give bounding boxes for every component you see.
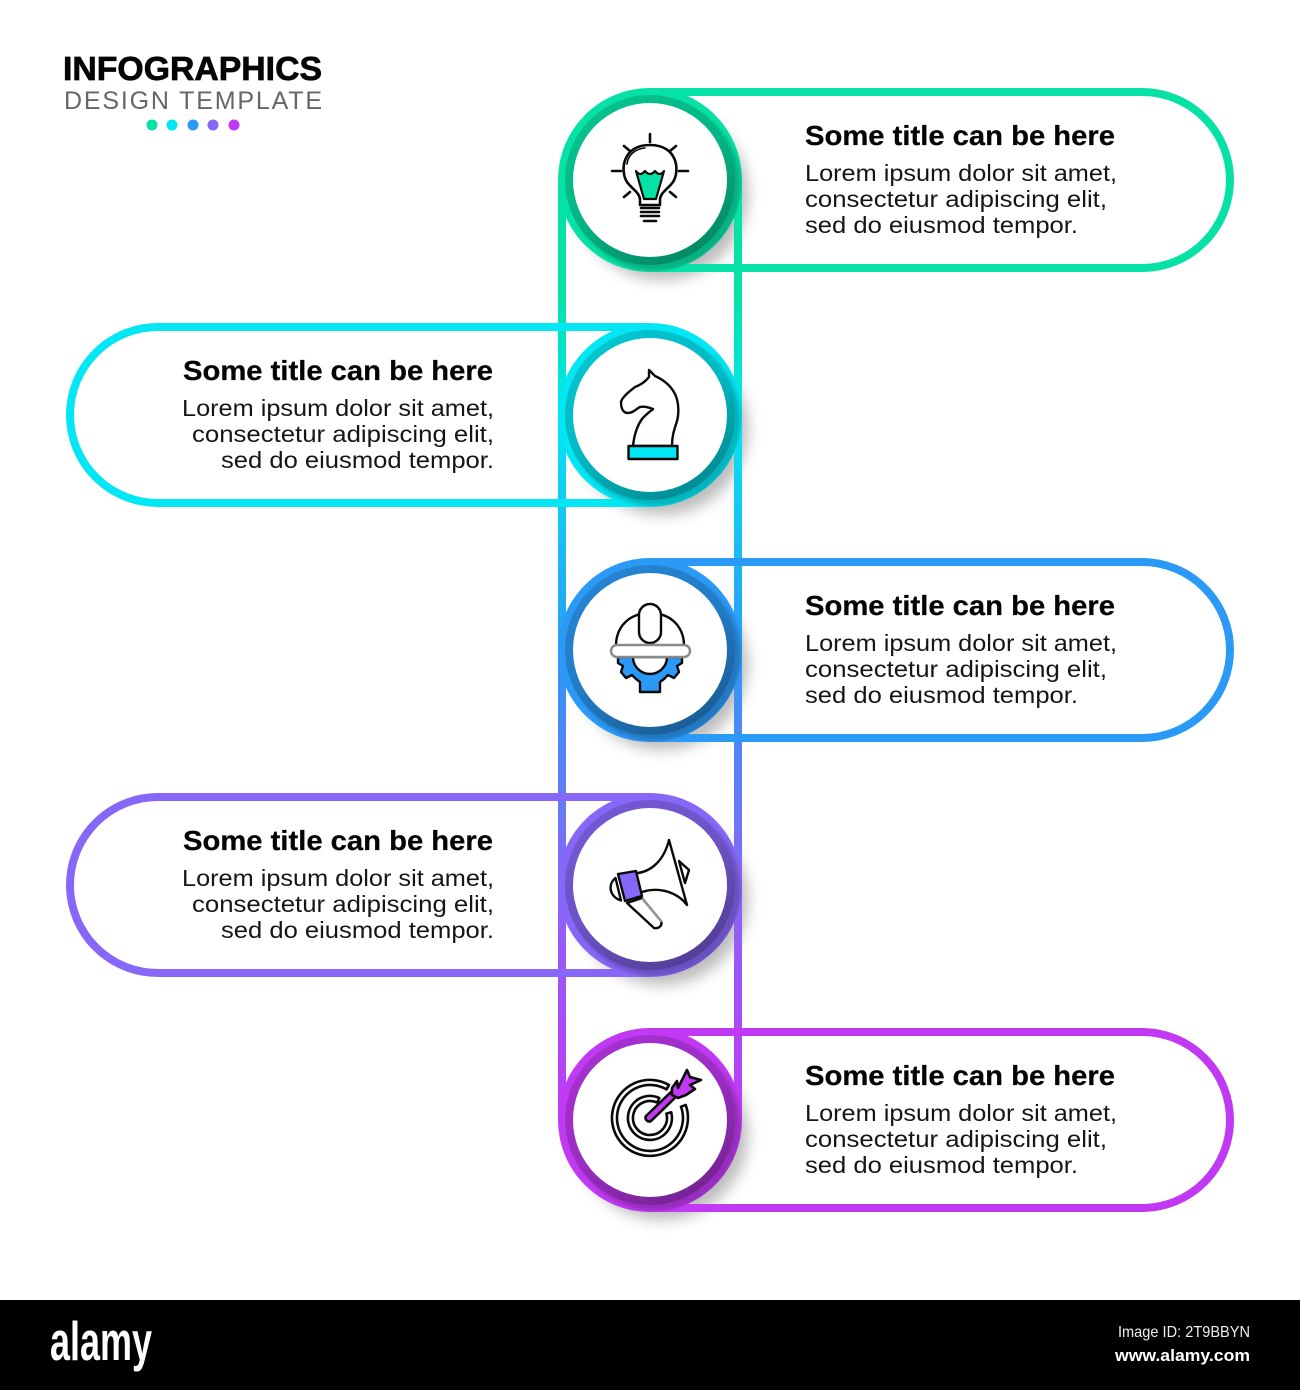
step 3 text: Some title can be here bbox=[805, 590, 1115, 621]
pill outline bbox=[650, 92, 1230, 268]
panel: step 3 bbox=[558, 558, 1230, 742]
step 5 text: consectetur adipiscing elit, bbox=[805, 1126, 1107, 1152]
step 1 text: sed do eiusmod tempor. bbox=[805, 212, 1078, 238]
step 4 text: sed do eiusmod tempor. bbox=[221, 917, 494, 943]
step 5 text: sed do eiusmod tempor. bbox=[805, 1152, 1078, 1178]
icon: chess knight bbox=[621, 370, 678, 459]
pill outline bbox=[650, 1032, 1230, 1208]
step 2 text bbox=[182, 355, 494, 473]
panel: step 4 bbox=[70, 793, 742, 977]
icon: light bulb bbox=[612, 134, 688, 221]
step 4 text bbox=[182, 825, 494, 943]
panel: step 2 bbox=[70, 323, 742, 507]
step 5 text: Some title can be here bbox=[805, 1060, 1115, 1091]
heading: infographics: INFOGRAPHICS bbox=[63, 50, 322, 87]
step 5 text: Lorem ipsum dolor sit amet, bbox=[805, 1100, 1117, 1126]
panel: step 5 bbox=[558, 1028, 1230, 1212]
step 2 text: sed do eiusmod tempor. bbox=[221, 447, 494, 473]
step 1 text: Some title can be here bbox=[805, 120, 1115, 151]
vertical connector rails bbox=[562, 180, 738, 1120]
badge circle bbox=[558, 793, 742, 977]
icon: helmet and gear bbox=[611, 604, 690, 692]
badge circle bbox=[558, 323, 742, 507]
footer: watermark bar bbox=[0, 1300, 1300, 1390]
step 4 text: Some title can be here bbox=[183, 825, 493, 856]
icon: megaphone bbox=[611, 840, 689, 928]
pill outline bbox=[70, 327, 650, 503]
icon: target and arrow bbox=[612, 1070, 701, 1156]
step 2 text: Some title can be here bbox=[183, 355, 493, 386]
step 4 text: consectetur adipiscing elit, bbox=[192, 891, 494, 917]
step 1 text: Lorem ipsum dolor sit amet, bbox=[805, 160, 1117, 186]
step 3 text: Lorem ipsum dolor sit amet, bbox=[805, 630, 1117, 656]
badge circle bbox=[558, 558, 742, 742]
badge circle bbox=[558, 88, 742, 272]
step 3 text bbox=[805, 590, 1117, 708]
step 5 text bbox=[805, 1060, 1117, 1178]
step 3 text: sed do eiusmod tempor. bbox=[805, 682, 1078, 708]
pill outline bbox=[70, 797, 650, 973]
circle drop shadows bbox=[576, 108, 748, 1220]
title block bbox=[63, 50, 322, 130]
step 1 text bbox=[805, 120, 1117, 238]
subheading: design template: DESIGN TEMPLATE bbox=[64, 87, 322, 115]
website: www.alamy.com bbox=[1114, 1346, 1250, 1365]
badge circle bbox=[558, 1028, 742, 1212]
pill outline bbox=[650, 562, 1230, 738]
step 3 text: consectetur adipiscing elit, bbox=[805, 656, 1107, 682]
panel: step 1 bbox=[558, 88, 1230, 272]
step 1 text: consectetur adipiscing elit, bbox=[805, 186, 1107, 212]
step 2 text: Lorem ipsum dolor sit amet, bbox=[182, 395, 494, 421]
watermark logo: alamy bbox=[50, 1310, 152, 1372]
step 2 text: consectetur adipiscing elit, bbox=[192, 421, 494, 447]
colour dots bbox=[146, 120, 240, 130]
image id: Image ID: 2T9BBYN bbox=[1118, 1324, 1250, 1341]
step 4 text: Lorem ipsum dolor sit amet, bbox=[182, 865, 494, 891]
